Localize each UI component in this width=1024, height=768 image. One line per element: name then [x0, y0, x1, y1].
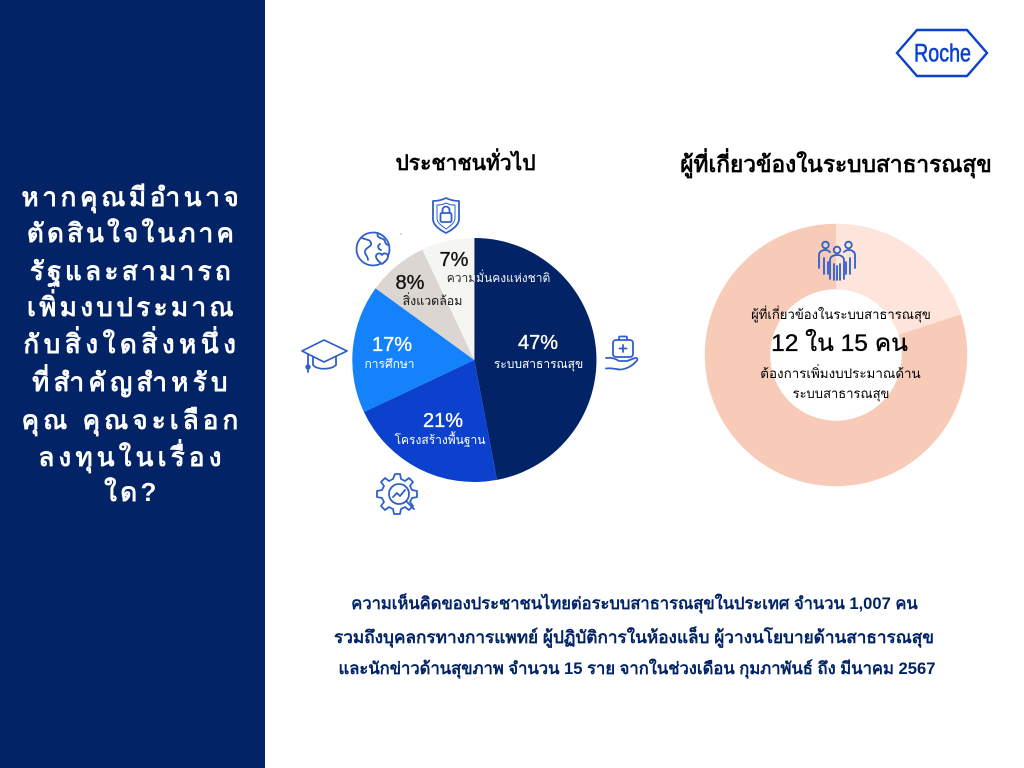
label: 21%: 21% [423, 410, 463, 432]
donut text: wants more health budget: ต้องการเพิ่มงบประมาณด้าน [760, 366, 921, 381]
panel: left question sidebar: กับสิ่งใดสิ่งหนึ่ง [23, 329, 241, 359]
label: 8%: 8% [396, 272, 424, 294]
logo: Roche: Roche [914, 40, 971, 68]
icon: gear with chart [377, 474, 417, 514]
logo: Roche [896, 28, 988, 78]
donut text: health system: ระบบสาธารณสุข [793, 386, 889, 401]
panel: left question sidebar: ตัดสินใจในภาค [27, 218, 237, 248]
panel: left question sidebar: ลงทุนในเรื่อง [38, 442, 226, 472]
footnote: survey description line 3: และนักข่าวด้านสุขภาพ จำนวน 15 ราย จากในช่วงเดือน กุมภาพันธ์ ถึง มีนาคม 2567 [339, 659, 935, 678]
donut text: people in the health system: ผู้ที่เกี่ยวข้องในระบบสาธารณสุข [751, 307, 931, 322]
panel: left question sidebar: รัฐและสามารถ [30, 256, 234, 286]
label: 47% health system: 47% [518, 332, 558, 354]
label text: national security: ความมั่นคงแห่งชาติ [447, 271, 550, 285]
slice: education 17% [352, 288, 474, 412]
icon: group of people [819, 242, 855, 280]
donut figure: 12 of 15 people: 12 ใน 15 คน [771, 330, 908, 357]
slice: national security 7% [422, 238, 474, 360]
panel: left question sidebar: คุณ คุณจะเลือก [22, 405, 242, 435]
panel: left question sidebar: หากคุณมีอำนาจ [22, 182, 242, 212]
slice: environment 8% [376, 250, 474, 360]
panel: left question sidebar: ใด? [104, 477, 160, 507]
panel: left question sidebar [0, 0, 265, 768]
slice: health system 47% [474, 238, 596, 480]
label text: health system: ระบบสาธารณสุข [494, 357, 583, 371]
label: 7%: 7% [440, 249, 468, 271]
icon: graduation cap [302, 340, 347, 372]
label: 17%: 17% [372, 334, 412, 356]
panel: left question sidebar: ที่สำคัญสำหรับ [32, 367, 232, 397]
heading: general public: ประชาชนทั่วไป [395, 152, 536, 175]
label text: environment: สิ่งแวดล้อม [403, 294, 462, 308]
slice: infrastructure 21% [364, 360, 497, 482]
icon: medical kit on hand [606, 336, 637, 370]
heading: people in the health system: ผู้ที่เกี่ยวข้องในระบบสาธารณสุข [680, 151, 992, 177]
footnote: survey description line 2: รวมถึงบุคลกรทางการแพทย์ ผู้ปฏิบัติการในห้องแล็บ ผู้วางนโยบายด้านสาธารณสุข [334, 627, 934, 647]
icon: tiny mark [400, 234, 402, 235]
label text: education: การศึกษา [365, 357, 414, 371]
label text: infrastructure: โครงสร้างพื้นฐาน [395, 433, 485, 447]
segment: remaining share [836, 224, 961, 335]
panel: left question sidebar: เพิ่มงบประมาณ [27, 292, 237, 322]
icon: earth with heart [356, 232, 390, 266]
footnote: survey description line 1: ความเห็นคิดของประชาชนไทยต่อระบบสาธารณสุขในประเทศ จำนวน 1,007 คน [351, 594, 918, 613]
